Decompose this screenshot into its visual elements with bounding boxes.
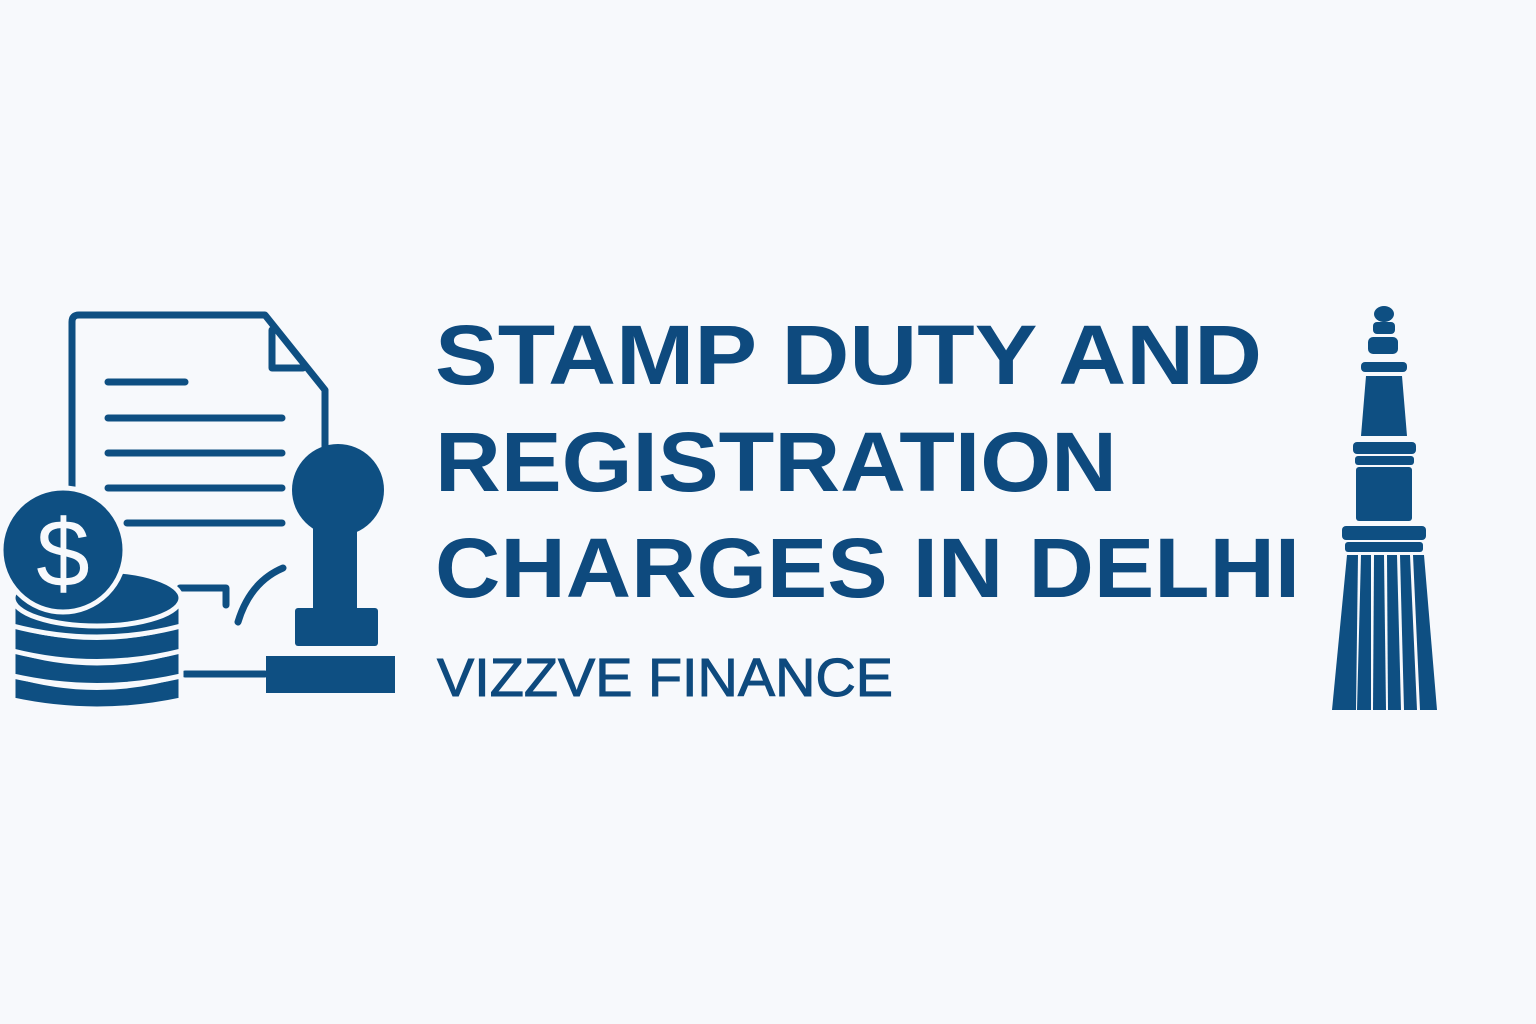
subtitle: brand: VIZZVE FINANCE bbox=[437, 648, 893, 708]
title: REGISTRATION bbox=[435, 415, 1117, 509]
icon: Qutub Minar tower bbox=[1332, 306, 1437, 710]
title bbox=[435, 308, 1300, 615]
icon: document with coins and stamp: $ bbox=[36, 500, 90, 607]
icon: coin stack bbox=[13, 570, 181, 709]
title: CHARGES IN DELHI bbox=[435, 521, 1300, 615]
title: STAMP DUTY AND bbox=[435, 308, 1262, 402]
icon: rubber stamp bbox=[266, 444, 395, 693]
icon: document bbox=[72, 315, 325, 674]
icon: document with coins and stamp bbox=[1, 315, 395, 709]
icon: dollar coin bbox=[1, 488, 125, 612]
